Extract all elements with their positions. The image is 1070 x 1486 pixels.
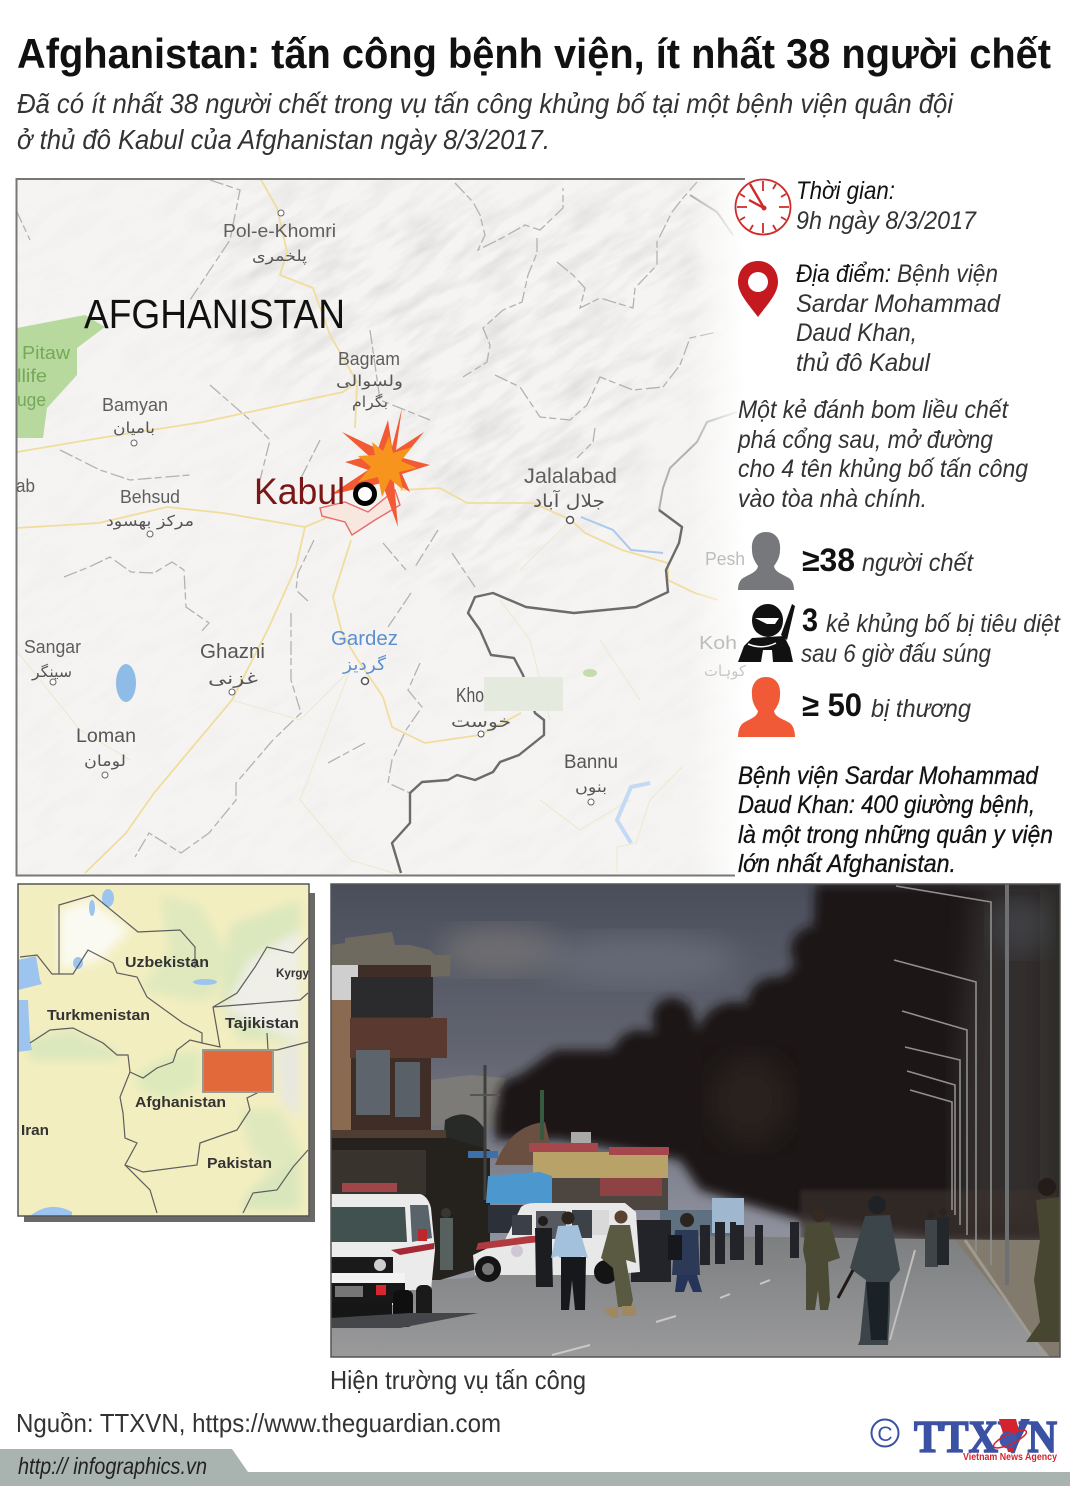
smoke [495,884,1050,1240]
road and shoulder [331,1235,1060,1357]
map labels: uge [17,390,46,410]
attack description: Một kẻ đánh bom liều chết [738,396,1009,424]
icon: terrorist [738,604,795,662]
man with backpack [668,1213,702,1292]
icon: clock [736,180,790,234]
Kabul district [320,490,400,535]
icon: injured person [738,677,795,737]
map labels: Behsud [120,487,180,507]
map labels: بنوں [575,778,607,796]
building left [331,932,451,977]
footer bar [0,1449,1070,1486]
location text: Daud Khan, [796,319,917,347]
map labels: خوست [451,712,511,732]
blue shirt man [551,1212,588,1310]
time text: Thời gian: [796,177,895,205]
map labels: غزنی [208,669,258,689]
panel: locator map [18,884,315,1222]
map labels: Sangar [24,637,81,657]
location text: Bệnh viện [897,260,998,288]
attack description: vào tòa nhà chính. [738,485,927,513]
map labels: بگرام [352,393,388,411]
hospital note: Daud Khan: 400 giường bệnh, [738,791,1035,819]
inset labels: Tajikistan [225,1015,299,1032]
map frame [16,179,745,876]
map labels: کوہات [704,662,747,680]
icon: copyright: C [877,1423,893,1446]
soldier 2 [803,1208,840,1310]
panel: key facts [736,177,1061,878]
map labels: Jalalabad [524,465,617,488]
soldier [601,1210,636,1318]
police pair [925,1217,949,1267]
logo: TTXVN: Vietnam News Agency [963,1452,1057,1463]
hospital note: Bệnh viện Sardar Mohammad [738,762,1039,790]
attack description [737,396,1028,513]
blue tarp [486,1172,552,1203]
storefront dark [331,1138,490,1280]
icon: location pin [738,261,778,317]
Kabul marker [356,484,374,504]
location text: Sardar Mohammad [796,290,1001,318]
map labels: Gardez [331,628,398,650]
inset labels: Afghanistan [135,1094,226,1111]
map labels: Pitaw [22,343,71,363]
icon: copyright [872,1420,898,1446]
map labels: ab [16,476,35,496]
map labels: بامیان [113,419,155,437]
panel: photo [331,884,1060,1357]
location text: thủ đô Kabul [796,349,931,377]
mid buildings [495,1122,555,1165]
icon: explosion [330,408,430,527]
stat: terrorists killed [801,602,1061,668]
panel: main map [16,178,746,876]
highlight rectangle [203,1050,273,1092]
time text [796,177,977,235]
stat: terrorists killed: sau 6 giờ đấu súng [801,640,991,668]
subtitle [17,88,954,155]
map labels: گردیز [342,654,387,675]
faint upper border [659,195,737,510]
map labels: llife [17,366,47,386]
inset labels: Kyrgy [276,966,309,980]
stat: injured: bị thương [871,695,971,723]
photo caption: Hiện trường vụ tấn công [330,1365,586,1395]
map labels: Bannu [564,752,618,773]
map labels: پلخمری [252,247,307,266]
Khost patch [484,677,563,711]
inset labels: Pakistan [207,1155,272,1172]
map labels: Bamyan [102,395,168,415]
subtitle: ở thủ đô Kabul của Afghanistan ngày 8/3/2017. [17,124,550,155]
stat: injured [802,687,971,723]
map labels: لومان [84,752,126,770]
map fade [690,179,746,875]
map labels: ولسوالی [336,372,403,390]
crowd [440,1208,799,1282]
inset labels [21,954,309,1172]
ambulance 2 [473,1203,640,1284]
map labels: Pol-e-Khomri [223,221,336,241]
inset water [18,889,217,1216]
attack description: cho 4 tên khủng bố tấn công [738,455,1028,483]
green reserve [17,315,105,438]
stat: dead: người chết [862,549,974,577]
map labels: Loman [76,726,136,747]
map labels: جلال آباد [533,489,605,512]
location text: Địa điểm: [796,260,891,288]
map labels: Ghazni [200,641,265,663]
map labels: Kho [456,685,484,707]
street lights [894,886,991,1265]
location text [796,260,1001,377]
country label: AFGHANISTAN [84,291,345,337]
inset labels: Uzbekistan [125,954,209,971]
hospital note [738,762,1053,878]
subtitle: Đã có ít nhất 38 người chết trong vụ tấn công khủng bố tại một bệnh viện quân đội [17,88,954,119]
inset labels: Turkmenistan [47,1007,150,1024]
stat: injured: ≥ 50 [802,687,862,723]
hospital note: lớn nhất Afghanistan. [738,850,956,878]
stat: terrorists killed: 3 [802,602,818,638]
stat: dead: ≥38 [802,542,855,578]
attack description: phá cổng sau, mở đường [737,426,993,454]
stat: dead [802,542,974,578]
man in black [535,1216,553,1287]
right soldier [1026,1178,1060,1342]
inset labels: Iran [21,1122,49,1139]
map labels: Koh [699,633,737,653]
map labels: سینگر [31,663,72,681]
time text: 9h ngày 8/3/2017 [796,207,977,235]
ambulance 1 [331,1183,478,1328]
icon: dead person [738,532,794,590]
Kabul label: Kabul [254,471,345,512]
country border [392,510,682,873]
source: Nguồn: TTXVN, https://www.theguardian.com [16,1408,501,1438]
police officer [838,1196,900,1345]
map labels: Bagram [338,349,400,369]
map labels: مرکز بهسود [106,512,194,530]
map labels [16,210,747,805]
footer URL: http:// infographics.vn [18,1453,207,1479]
map labels: Pesh [705,549,745,569]
far wall [800,1190,1055,1242]
hills [430,1075,505,1125]
